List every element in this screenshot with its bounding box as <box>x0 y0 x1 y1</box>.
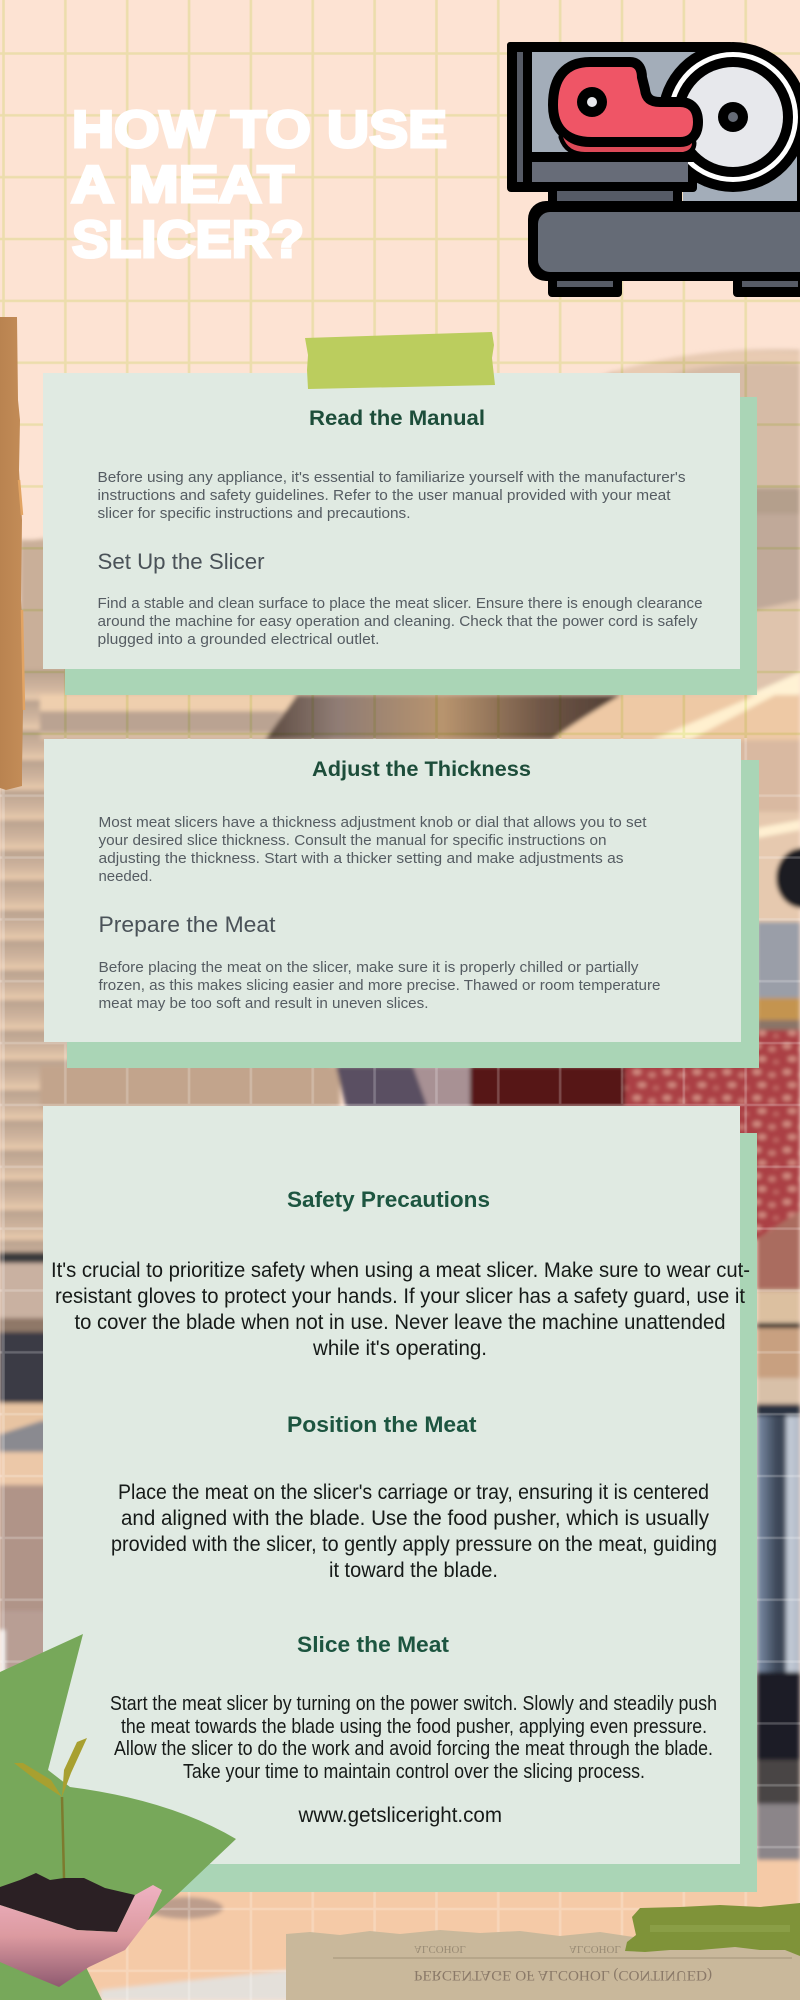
title: A MEAT <box>71 156 294 214</box>
text: set up the slicer: Find a stable and clean surface to place the meat slicer. Ensure there is enough clearance <box>98 596 702 612</box>
website url: www.getsliceright.com <box>298 1804 502 1827</box>
text: read the manual <box>98 470 686 522</box>
text: safety precautions: It's crucial to prioritize safety when using a meat slicer. Make sure to wear cut- <box>51 1259 750 1282</box>
text: adjust the thickness: adjusting the thickness. Start with a thicker setting and make adjustments as <box>98 851 624 867</box>
panel: adjust the thickness and prepare the meat <box>44 739 759 1068</box>
text: set up the slicer: around the machine for easy operation and cleaning. Check that the power cord is safely <box>98 614 698 630</box>
text: adjust the thickness: needed. <box>98 869 152 885</box>
text: safety precautions: to cover the blade when not in use. Never leave the machine unattended <box>74 1311 726 1334</box>
text: prepare the meat <box>98 960 660 1012</box>
heading: adjust the thickness: Adjust the Thickness <box>312 758 531 781</box>
green paint brush stroke <box>625 1903 800 1956</box>
torn paper with flipped text: PERCENTAGE OF ALCOHOL (CONTINUED) <box>414 1967 712 1983</box>
text: set up the slicer <box>98 596 702 648</box>
text: adjust the thickness <box>98 815 646 885</box>
panel card <box>43 1106 740 1864</box>
green leaf shapes <box>0 1634 236 2000</box>
text: safety precautions <box>51 1259 750 1360</box>
text: read the manual: slicer for specific instructions and precautions. <box>98 506 410 522</box>
decorative cardboard strip <box>0 317 24 790</box>
soil <box>0 1873 135 1932</box>
text: set up the slicer: plugged into a grounded electrical outlet. <box>98 632 380 648</box>
heading: set up the slicer: Set Up the Slicer <box>98 549 264 574</box>
text: safety precautions: while it's operating. <box>312 1337 487 1360</box>
text: slice the meat: Start the meat slicer by turning on the power switch. Slowly and steadily push <box>110 1693 717 1715</box>
title: SLICER? <box>72 211 304 269</box>
panel shadow <box>65 1133 757 1892</box>
hand <box>0 1885 162 1987</box>
text: slice the meat: Take your time to maintain control over the slicing process. <box>183 1761 645 1783</box>
sprout leaves <box>14 1738 87 1797</box>
panel: read the manual and set up the slicer <box>43 373 757 695</box>
text: slice the meat: Allow the slicer to do the work and avoid forcing the meat through the blade. <box>114 1738 713 1760</box>
panel card <box>43 373 740 669</box>
panel: safety, positioning and slicing <box>43 1106 757 1892</box>
text: read the manual: instructions and safety guidelines. Refer to the user manual provided with your meat <box>98 488 670 504</box>
text: prepare the meat: frozen, as this makes slicing easier and more precise. Thawed or room temperature <box>98 978 660 994</box>
text: position the meat: it toward the blade. <box>329 1559 498 1582</box>
text: prepare the meat: Before placing the meat on the slicer, make sure it is properly chilled or partially <box>98 960 639 976</box>
text: slice the meat: the meat towards the blade using the food pusher, applying even pressure. <box>121 1716 707 1738</box>
text: read the manual: Before using any appliance, it's essential to familiarize yourself with the manufacturer's <box>98 470 686 486</box>
text: adjust the thickness: Most meat slicers have a thickness adjustment knob or dial that allows you to set <box>98 815 646 831</box>
text: position the meat: and aligned with the blade. Use the food pusher, which is usually <box>121 1507 709 1530</box>
text: adjust the thickness: your desired slice thickness. Consult the manual for specific instructions on <box>98 833 606 849</box>
illustration: hand holding a sprout on green leaves <box>0 1634 236 2000</box>
panel card <box>44 739 741 1042</box>
heading: read the manual: Read the Manual <box>309 407 485 430</box>
heading: prepare the meat: Prepare the Meat <box>98 912 276 937</box>
panel shadow <box>65 397 757 695</box>
text: safety precautions: resistant gloves to protect your hands. If your slicer has a safety guard, use it <box>55 1285 745 1308</box>
torn paper with flipped text: ALCOHOL <box>414 1943 466 1955</box>
text: prepare the meat: meat may be too soft and result in uneven slices. <box>98 996 428 1012</box>
text: position the meat: provided with the slicer, to gently apply pressure on the meat, guiding <box>111 1533 717 1556</box>
heading: position the meat: Position the Meat <box>287 1412 477 1437</box>
text: position the meat <box>111 1481 717 1582</box>
torn paper with flipped text: ALCOHOL <box>569 1943 621 1955</box>
title <box>71 101 447 269</box>
text: slice the meat <box>110 1693 717 1783</box>
heading: safety precautions: Safety Precautions <box>287 1187 490 1212</box>
panel shadow <box>67 760 759 1068</box>
sprout stem <box>62 1797 64 1878</box>
text: position the meat: Place the meat on the slicer's carriage or tray, ensuring it is centered <box>118 1481 709 1504</box>
decorative green tape <box>305 332 495 389</box>
heading: slice the meat: Slice the Meat <box>297 1632 450 1657</box>
title: HOW TO USE <box>72 101 447 159</box>
torn paper with flipped text <box>286 1930 800 2000</box>
icon: meat slicer <box>507 42 800 297</box>
